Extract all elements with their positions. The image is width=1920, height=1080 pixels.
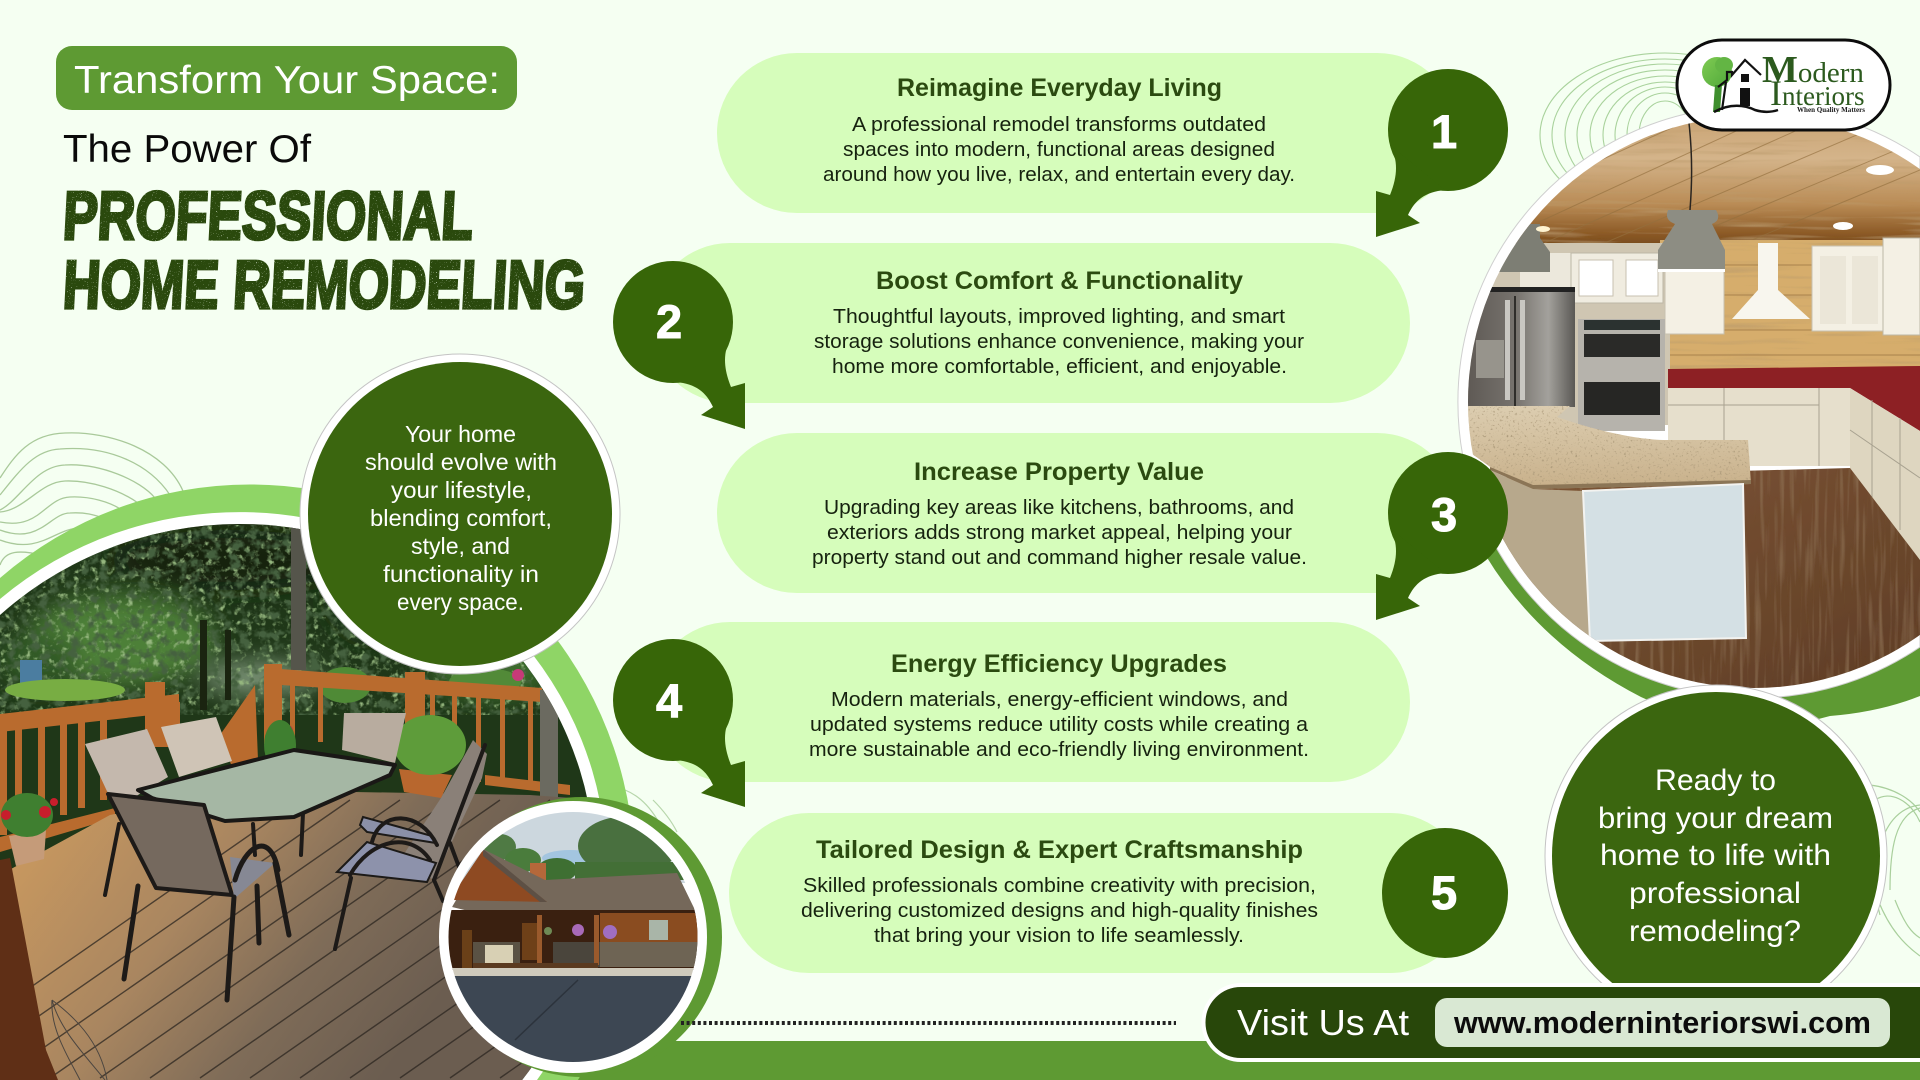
panel: step 1 xyxy=(717,53,1457,213)
front chair xyxy=(108,794,232,895)
number bubble 5: 5 xyxy=(1431,866,1457,919)
number bubble 2: 2 xyxy=(656,295,682,348)
number bubble 2 xyxy=(613,261,745,429)
deck photo group xyxy=(0,484,628,1080)
contour lines: bottom right xyxy=(1870,785,1920,956)
panel: step 1: A professional remodel transforms outdated xyxy=(852,114,1266,136)
left post xyxy=(0,858,58,1080)
quote text: style, and xyxy=(411,533,510,559)
quote text: functionality in xyxy=(383,561,539,587)
call to action text: bring your dream xyxy=(1598,802,1833,835)
main heading: HOME REMODELING xyxy=(61,247,587,323)
logo wordmark: Modern xyxy=(1762,49,1864,91)
logo xyxy=(1677,40,1890,130)
visit bar xyxy=(1204,985,1920,1060)
photo: kitchen xyxy=(1468,112,1920,690)
number bubble 1: 1 xyxy=(1431,105,1457,158)
right chair back and seats xyxy=(400,740,487,880)
green ring xyxy=(0,484,635,1080)
deck floor xyxy=(0,790,600,1080)
logo tagline: When Quality Matters xyxy=(1797,106,1865,114)
panel: step 1: Reimagine Everyday Living xyxy=(897,74,1222,102)
title badge: Transform Your Space: xyxy=(74,59,500,102)
quote circle xyxy=(300,354,620,674)
panel: step 4: Energy Efficiency Upgrades xyxy=(891,650,1227,678)
website box: www.moderninteriorswi.com xyxy=(1453,1005,1871,1040)
white ring xyxy=(1458,106,1920,698)
contour lines: top right xyxy=(1540,53,1790,217)
panel: step 2: Thoughtful layouts, improved lighting, and smart xyxy=(833,306,1285,328)
green crescent xyxy=(442,797,722,1077)
panel: step 4: updated systems reduce utility costs while creating a xyxy=(810,714,1309,736)
call to action text: professional xyxy=(1629,877,1801,910)
main heading: PROFESSIONAL xyxy=(61,178,475,254)
main heading xyxy=(61,178,587,323)
panel: step 5 xyxy=(729,813,1470,973)
call to action circle xyxy=(1545,685,1887,1027)
pendant lamps xyxy=(1688,115,1692,210)
contour lines: left xyxy=(0,433,183,565)
panel: step 3: Increase Property Value xyxy=(914,458,1204,486)
website box xyxy=(1435,998,1890,1047)
call to action text: home to life with xyxy=(1600,839,1831,872)
panel: step 5: Skilled professionals combine creativity with precision, xyxy=(803,875,1316,897)
title badge xyxy=(56,46,517,110)
kitchen crescent xyxy=(1486,500,1920,726)
logo wordmark second line: Interiors xyxy=(1770,73,1864,113)
panel: step 3 xyxy=(717,433,1457,593)
panel: step 3: exteriors adds strong market appeal, helping your xyxy=(827,522,1292,544)
logo house xyxy=(1714,60,1778,112)
ceiling lights xyxy=(1866,165,1894,175)
photo: deck with table and chairs xyxy=(0,524,587,1080)
granite counter xyxy=(1468,406,1751,489)
panel: step 4 xyxy=(650,622,1410,782)
island base xyxy=(1490,470,1590,645)
panel: step 3: property stand out and command higher resale value. xyxy=(812,547,1307,569)
panel: step 5: delivering customized designs and high-quality finishes xyxy=(801,900,1318,922)
subtitle: The Power Of xyxy=(63,128,311,171)
quote text: should evolve with xyxy=(365,449,557,475)
pine wall xyxy=(1660,240,1920,372)
number bubble 4 xyxy=(613,639,745,807)
decorative leaf outline xyxy=(52,1000,107,1080)
panel: step 2 xyxy=(650,243,1410,403)
call to action text xyxy=(1598,764,1833,948)
number bubble 5 xyxy=(1382,828,1508,958)
white ring xyxy=(439,801,707,1073)
visit bar: Visit Us At xyxy=(1237,1002,1409,1043)
planter xyxy=(399,769,452,798)
call to action text: remodeling? xyxy=(1629,915,1801,948)
lower cabinets xyxy=(1668,388,1850,466)
hood xyxy=(1732,243,1810,319)
logo tree xyxy=(1702,57,1733,112)
flowers xyxy=(512,669,524,681)
floor xyxy=(1480,468,1920,690)
panel: step 2: storage solutions enhance convenience, making your xyxy=(814,331,1304,353)
quote text: your lifestyle, xyxy=(391,477,532,503)
kitchen photo group xyxy=(1458,106,1920,698)
panel: step 5: Tailored Design & Expert Craftsmanship xyxy=(816,836,1303,864)
quote text: blending comfort, xyxy=(370,505,552,531)
dotted connector xyxy=(681,1021,1176,1025)
number bubble 3 xyxy=(1376,452,1508,620)
panel: step 1: spaces into modern, functional areas designed xyxy=(843,139,1275,161)
panel: step 5: that bring your vision to life seamlessly. xyxy=(874,925,1244,947)
left beige wall and upper cabinets xyxy=(1468,243,1670,425)
panel: step 2: home more comfortable, efficient, and enjoyable. xyxy=(832,356,1287,378)
table xyxy=(138,750,395,821)
call to action text: Ready to xyxy=(1655,764,1776,797)
photo: house exterior xyxy=(445,808,705,1066)
panel: step 4: Modern materials, energy-efficient windows, and xyxy=(831,689,1288,711)
contour lines: near house xyxy=(625,790,677,870)
white ring xyxy=(0,512,607,1080)
fridge xyxy=(1468,287,1575,407)
panel: step 3: Upgrading key areas like kitchens, bathrooms, and xyxy=(824,497,1294,519)
red counter xyxy=(1668,366,1920,431)
quote text xyxy=(365,421,557,615)
footer band xyxy=(530,1041,1920,1080)
number bubble 4: 4 xyxy=(656,674,682,727)
number bubble 3: 3 xyxy=(1431,488,1457,541)
railing xyxy=(0,664,570,852)
number bubble 1 xyxy=(1376,69,1508,237)
flower pot xyxy=(9,830,46,866)
panel: step 4: more sustainable and eco-friendly living environment. xyxy=(809,739,1309,761)
ovens xyxy=(1578,319,1665,431)
chairs back row xyxy=(85,729,168,796)
quote text: every space. xyxy=(397,589,524,615)
panel: step 1: around how you live, relax, and entertain every day. xyxy=(823,164,1295,186)
panel: step 2: Boost Comfort & Functionality xyxy=(876,267,1243,295)
chair and table frames xyxy=(105,745,485,949)
house photo group xyxy=(439,797,722,1077)
quote text: Your home xyxy=(405,421,516,447)
